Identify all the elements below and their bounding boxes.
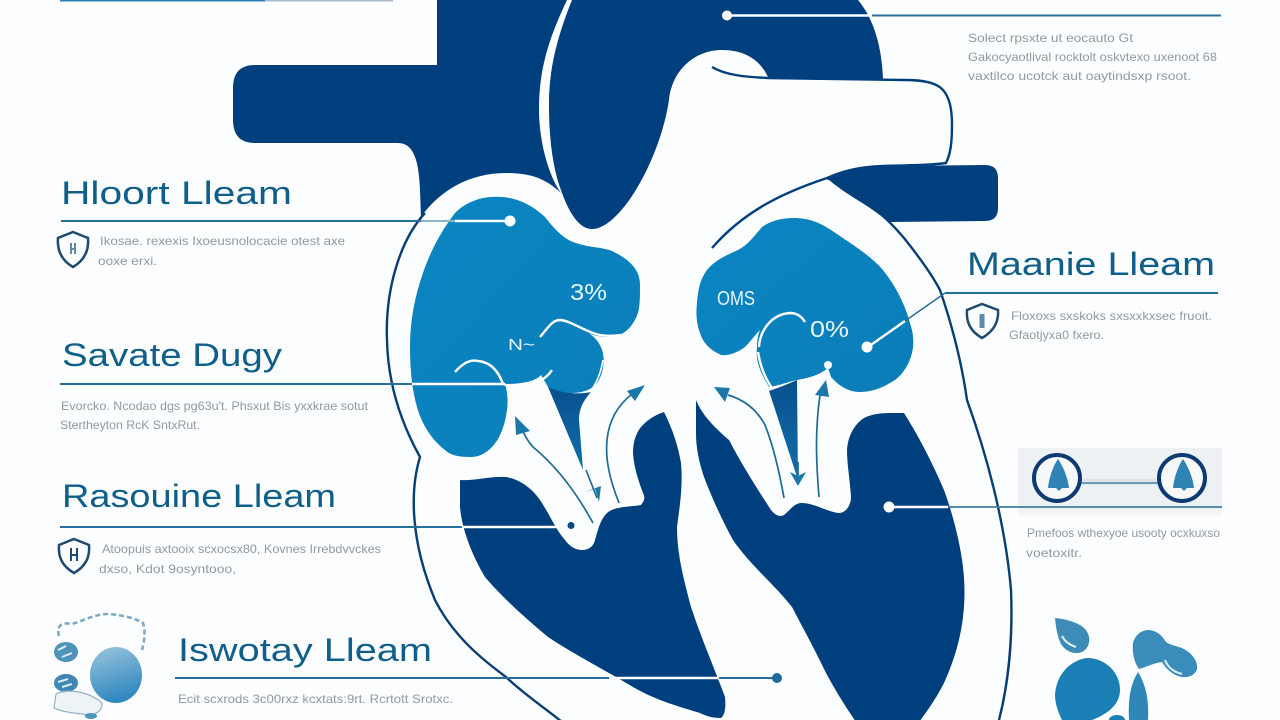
- heart outer outline right: [827, 178, 1011, 720]
- text: Rasouine Lleam description: dxso, Kdot 9osyntooo,: [99, 562, 236, 576]
- text: Hloort Lleam description: Ikosae. rexexis Ixoeusnolocacie otest axe: [100, 234, 345, 248]
- left atrium: [410, 197, 640, 457]
- heart illustration: [233, 0, 1011, 720]
- heading: Iswotay Lleam: Iswotay Lleam: [178, 632, 432, 668]
- text: top right description: Gakocyaotlival rocktolt oskvtexo uxenoot 68: [968, 50, 1217, 64]
- text: Rasouine Lleam description: [99, 542, 381, 576]
- value: right upper: OMS: [717, 288, 755, 310]
- left valve leaflet: [548, 387, 591, 470]
- text: right ventricle description: Pmefoos wthexyoe usooty ocxkuxso: [1027, 526, 1220, 540]
- leader: Savate Dugy: [60, 383, 505, 385]
- leader: Rasouine Lleam: [60, 522, 574, 529]
- icon: shield 1: [58, 232, 88, 267]
- text: right ventricle description: [1026, 526, 1220, 560]
- panel: valve gauge: [1018, 448, 1222, 517]
- heart outer outline left: [387, 213, 562, 720]
- leader: Hloort Lleam: [61, 216, 516, 226]
- top-left partial rule: [60, 0, 393, 2]
- icon: textured sphere cluster: [54, 614, 145, 719]
- text: Savate Dugy description: Evorcko. Ncodao dgs pg63u't. Phsxut Bis yxxkrae sotut: [61, 399, 369, 413]
- droplet small: [1109, 715, 1125, 720]
- text: top right description: vaxtilco ucotck aut oaytindsxp rsoot.: [968, 69, 1191, 83]
- text: Rasouine Lleam description: Atoopuis axtooix scxocsx80, Kovnes Irrebdvvckes: [102, 542, 381, 556]
- great vessel: left arm: [233, 0, 567, 217]
- value: left lower: N~: [508, 337, 535, 354]
- great vessel: aorta: [549, 0, 883, 229]
- droplet double: [1133, 630, 1197, 677]
- text: Maanie Lleam description: Floxoxs sxskoks sxsxxkxsec fruoit.: [1011, 309, 1212, 323]
- droplet large: [1055, 658, 1120, 720]
- text: Hloort Lleam description: [98, 234, 345, 268]
- leader: right ventricle: [884, 502, 1222, 512]
- left ventricle: [460, 412, 725, 718]
- arrow: left downward: [585, 470, 601, 502]
- droplet leaf: [1129, 672, 1148, 720]
- heading: Savate Dugy: Savate Dugy: [62, 337, 282, 373]
- valve edge navy line: [590, 360, 603, 392]
- icon: shield 3: [967, 304, 998, 338]
- value: right lower: 0%: [810, 316, 849, 342]
- white vessel outline: [712, 67, 952, 248]
- icon: gauge right: [1159, 455, 1205, 501]
- right valve white arc: [758, 313, 805, 388]
- icon: gauge left: [1034, 455, 1080, 501]
- heading: Maanie Lleam: Maanie Lleam: [967, 246, 1215, 282]
- droplet highlight: [1062, 636, 1182, 674]
- text: Maanie Lleam description: Gfaotjyxa0 fxero.: [1009, 328, 1104, 342]
- valve dot right: [824, 361, 832, 369]
- heading: Rasouine Lleam: Rasouine Lleam: [62, 478, 336, 514]
- leader: top right: [722, 10, 1221, 20]
- text: Savate Dugy description: Stertheyton RcK SntxRut.: [60, 418, 200, 432]
- leader: Maanie Lleam: [862, 293, 1218, 352]
- leader: Iswotay Lleam: [175, 673, 782, 683]
- droplet top left: [1055, 618, 1089, 653]
- value: left upper: 3%: [570, 279, 607, 305]
- icon: shield 2: [59, 539, 89, 573]
- text: Iswotay Lleam description: Ecit scxrods 3c00rxz kcxtats:9rt. Rcrtott Srotxc.: [178, 692, 453, 706]
- arrow: right downward: [790, 462, 806, 486]
- text: Hloort Lleam description: ooxe erxi.: [98, 254, 157, 268]
- arrow: left upward 2: [607, 385, 645, 503]
- icon: water droplets: [1055, 618, 1197, 720]
- text: top right description: [968, 31, 1217, 83]
- pulmonary arm right: [827, 165, 998, 222]
- text: right ventricle description: voetoxitr.: [1026, 546, 1082, 560]
- text: Maanie Lleam description: [1009, 309, 1212, 342]
- heading: Hloort Lleam: Hloort Lleam: [61, 175, 292, 211]
- left valve white line: [540, 320, 621, 337]
- left lower valve white line: [455, 361, 552, 387]
- text: top right description: Solect rpsxte ut eocauto Gt: [968, 31, 1134, 45]
- arrow: left upward 1: [515, 416, 593, 523]
- right ventricle: [696, 400, 964, 720]
- right atrium: [696, 218, 913, 392]
- arrow: right upward 2: [815, 380, 829, 497]
- arrow: right upward 1: [714, 387, 784, 498]
- right valve leaflet: [769, 380, 798, 480]
- text: Savate Dugy description: [60, 399, 369, 432]
